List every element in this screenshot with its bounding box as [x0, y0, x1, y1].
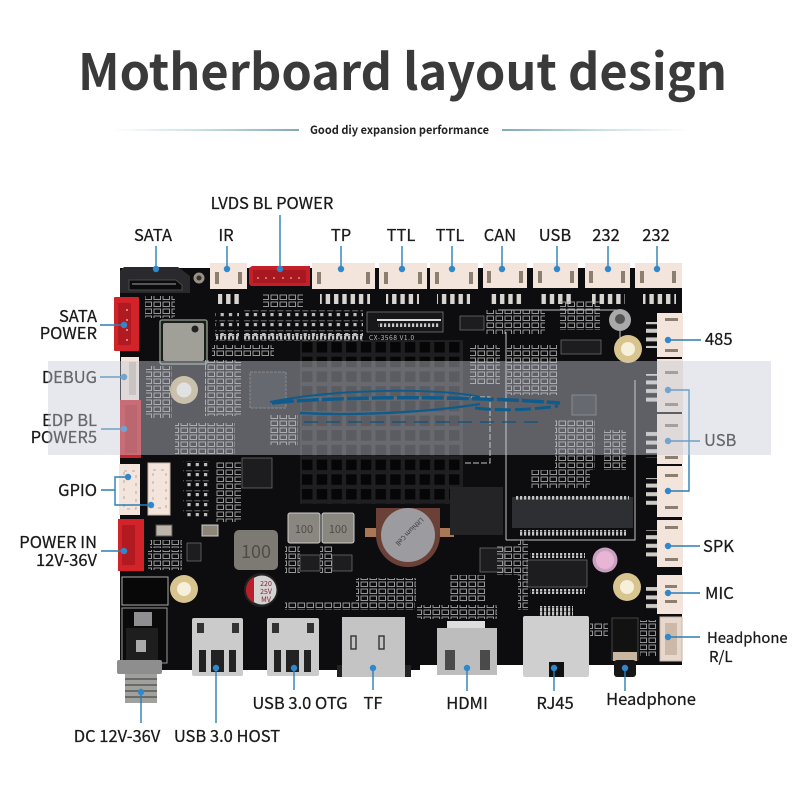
M.2 slot: [512, 496, 633, 536]
label: USB 3.0 HOST: [174, 665, 280, 747]
label: HDMI: [446, 665, 488, 714]
USB 3.0 OTG port: [267, 618, 319, 676]
IC chip: [527, 553, 587, 594]
small chip: [242, 458, 272, 488]
mounting holes: [170, 309, 642, 603]
top connector: TTL 1: [379, 263, 427, 304]
top connector: IR: [210, 263, 247, 304]
motherboard: [114, 263, 683, 703]
top connector: 232 A: [585, 263, 630, 304]
label: LVDS BL POWER: [211, 190, 333, 272]
label: USB 3.0 OTG: USB 3.0 OTG: [252, 690, 348, 714]
coin cell battery: [365, 508, 454, 567]
EDP BL power connector: [120, 400, 141, 458]
label: EDP BL POWER5: EDP BL: [42, 407, 97, 431]
electrolytic capacitor 220uF: 25V: [260, 587, 273, 597]
label: SATA: SATA: [134, 222, 172, 246]
label: GPIO: GPIO: [58, 477, 97, 501]
heatsink: [300, 340, 463, 504]
right connector: 485: [645, 313, 683, 357]
label: USB 3.0 HOST: USB 3.0 HOST: [174, 723, 280, 747]
inductors: 100: [329, 521, 347, 537]
label: POWER IN 12V-36V: [19, 529, 127, 571]
right connector: headphone R/L: [660, 617, 682, 661]
large dark chip: [450, 487, 503, 535]
headphone jack: [612, 618, 638, 677]
electrolytic capacitor 220uF: [244, 573, 278, 607]
label: SATA POWER: SATA: [59, 303, 97, 327]
label: SPK: [665, 533, 734, 557]
wifi module: [160, 320, 207, 364]
DC jack: [117, 608, 167, 703]
label: TF: TF: [364, 690, 382, 714]
pink capacitor: [592, 548, 618, 572]
label: Headphone: Headphone: [606, 686, 696, 710]
inductors: [234, 513, 354, 570]
power in connector: [118, 519, 144, 571]
label: Headphone R/L: R/L: [709, 646, 733, 667]
label: EDP BL POWER5: POWER5: [31, 424, 97, 448]
label: CAN: CAN: [484, 222, 516, 246]
title: Motherboard layout design: [78, 33, 727, 105]
assorted ICs: [187, 316, 601, 572]
label: EDP BL POWER5: [31, 407, 127, 448]
right connector: MIC: [645, 575, 683, 614]
label: TTL 2: [436, 222, 464, 272]
electrolytic capacitor 220uF: MV: [261, 595, 272, 605]
right connector: USB 3: [645, 466, 683, 517]
top connector: 232 B: [635, 263, 682, 304]
label: SPK: SPK: [703, 533, 734, 557]
label: DC 12V-36V: DC 12V-36V: [74, 723, 161, 747]
DEBUG connector: [121, 357, 139, 400]
watermark logo streaks: [270, 391, 560, 422]
top connector: TP: [312, 263, 375, 304]
label: DC 12V-36V: [74, 689, 161, 747]
label: GPIO: [58, 474, 154, 508]
FPC connector: [367, 312, 443, 332]
top connector: LVDS BL POWER (red): [249, 266, 310, 286]
top connector: TTL 2: [430, 263, 478, 304]
label: SATA POWER: [40, 303, 127, 344]
right connector: SPK: [645, 520, 683, 567]
label: LVDS BL POWER: LVDS BL POWER: [211, 190, 333, 214]
label: Headphone R/L: Headphone: [707, 627, 788, 648]
label: HDMI: HDMI: [446, 690, 488, 714]
label: IR: IR: [218, 222, 234, 246]
label: Headphone R/L: [665, 627, 788, 667]
subtitle with divider lines: Good diy expansion performance: [310, 122, 489, 138]
label: USB 3.0 OTG: [252, 665, 348, 714]
pin headers: [183, 310, 363, 518]
label: SATA POWER: POWER: [40, 320, 97, 344]
label: USB top: USB: [539, 222, 571, 246]
SATA connector: [120, 267, 190, 293]
right connector: USB 1: [645, 359, 683, 412]
label: USB right with bracket: [665, 387, 737, 494]
RJ45 port: [523, 606, 589, 677]
USB 3.0 host port: [192, 618, 243, 676]
electrolytic capacitor 220uF: 220: [260, 579, 272, 589]
label: 232 A: 232: [592, 222, 620, 246]
board PCB: [120, 268, 682, 670]
silkscreen: CX-3568 V1.0: [369, 332, 415, 342]
label: RJ45: [536, 665, 574, 714]
tact switches: [156, 525, 218, 536]
label: DEBUG: DEBUG: [42, 364, 97, 388]
black box near DC jack: [122, 577, 168, 605]
label: TTL 2: TTL: [436, 222, 464, 246]
translucent overlay band: [48, 361, 771, 455]
label: Headphone: [606, 665, 696, 710]
label: TF: [364, 665, 382, 714]
label: POWER IN 12V-36V: 12V-36V: [36, 547, 98, 571]
label: TTL 1: TTL: [387, 222, 415, 246]
label: POWER IN 12V-36V: POWER IN: [19, 529, 97, 553]
TF card slot: [337, 617, 411, 677]
label: USB top: [539, 222, 571, 272]
label: TP: [331, 222, 351, 272]
label: MIC: MIC: [705, 580, 734, 604]
right connector: USB 2: [645, 414, 683, 464]
CPU chip: [250, 372, 286, 408]
label: IR: [218, 222, 234, 272]
label: USB right with bracket: USB: [704, 427, 737, 451]
label: DEBUG: [42, 364, 127, 388]
SATA power connector: [114, 297, 139, 351]
coin cell battery: Lithium Cell: [394, 516, 427, 549]
label: MIC: [665, 580, 734, 604]
inductors: 100: [295, 521, 313, 537]
label: 232 B: [642, 222, 670, 272]
SMD component fields: [145, 293, 656, 656]
label: 485: [665, 326, 732, 350]
label: CAN: [484, 222, 516, 272]
antenna socket: [194, 272, 204, 284]
HDMI port: [437, 621, 497, 675]
label: 485: 485: [705, 326, 732, 350]
label: RJ45: RJ45: [536, 690, 574, 714]
label: TP: TP: [331, 222, 351, 246]
inductors: 100: [241, 538, 271, 564]
label: SATA: [134, 222, 172, 272]
GPIO connectors: [119, 463, 170, 515]
label: TTL 1: [387, 222, 415, 272]
label: 232 A: [592, 222, 620, 272]
label: 232 B: 232: [642, 222, 670, 246]
top connector: CAN: [483, 263, 527, 304]
top connector: USB: [533, 263, 578, 304]
